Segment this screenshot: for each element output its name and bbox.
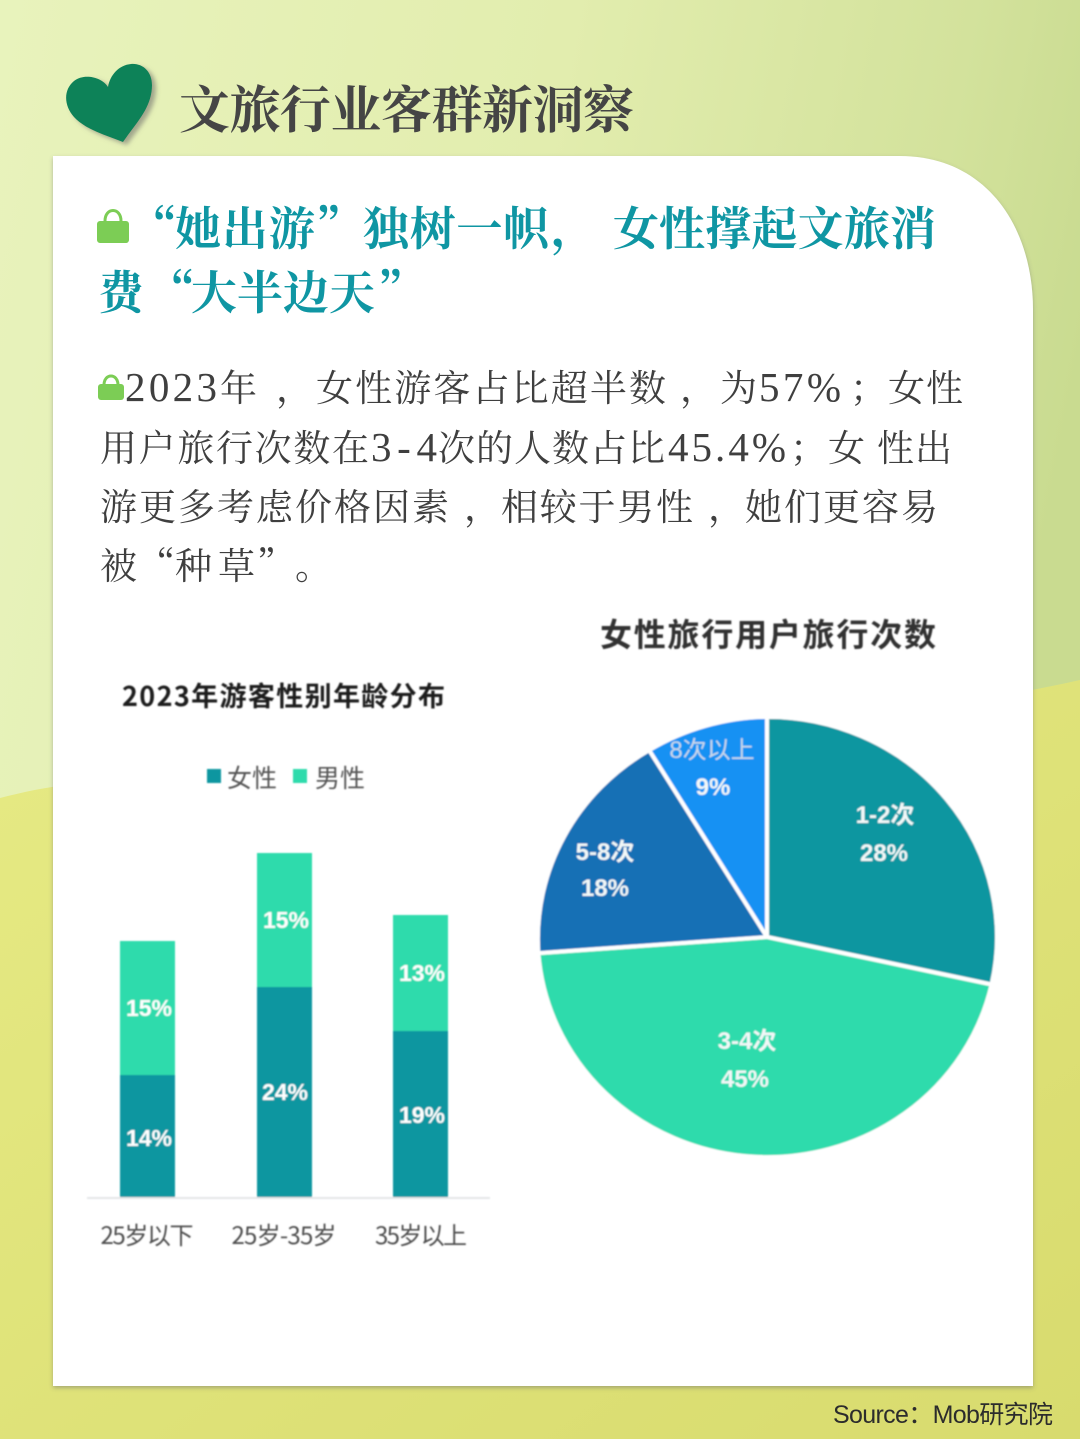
- legend: 男性: [315, 759, 365, 795]
- body text: ，: [680, 369, 717, 410]
- pie labels: 5-8次: [576, 839, 634, 866]
- pie labels: 9%: [696, 774, 730, 801]
- body text: ”: [257, 536, 294, 590]
- heading: ”: [316, 193, 362, 259]
- bar value labels: 19%: [399, 1102, 445, 1128]
- heading: 独树一帜: [363, 193, 553, 259]
- body text: 为: [720, 368, 757, 410]
- bar value labels: 15%: [263, 907, 309, 933]
- bar value labels: 13%: [399, 960, 445, 986]
- body text: 3-4: [371, 424, 437, 470]
- legend: [207, 759, 365, 795]
- chart title: 女性旅行用户旅行次数: [600, 610, 936, 656]
- pie labels: 45%: [721, 1066, 769, 1093]
- icon: body bag: [98, 376, 124, 400]
- slices: [538, 717, 997, 1157]
- heading: 她出游: [175, 193, 315, 259]
- body text: 57%: [759, 364, 841, 410]
- body text: 相较于男性: [501, 487, 693, 529]
- bars: [87, 853, 490, 1199]
- body text: ，: [708, 488, 745, 529]
- body text: 游更多考虑价格因素: [100, 487, 449, 529]
- body text: ；: [790, 429, 827, 470]
- icon: heading bag: [97, 210, 129, 243]
- body text: 女: [828, 428, 865, 470]
- category labels: 35岁以上: [375, 1216, 467, 1251]
- pie labels: 28%: [860, 840, 908, 867]
- pie labels: 3-4次: [718, 1028, 776, 1055]
- pie chart: trips: [538, 610, 997, 1157]
- bar value labels: 24%: [262, 1079, 308, 1105]
- icon: heart: [66, 64, 152, 142]
- pie labels: 1-2次: [856, 802, 914, 829]
- body text: 2023: [125, 364, 217, 410]
- body text: 女性: [888, 368, 963, 410]
- body text: 。: [295, 547, 332, 588]
- heading: [97, 193, 936, 323]
- title: 文旅行业客群新洞察: [179, 69, 634, 143]
- body text: 种草: [175, 546, 255, 588]
- body text: ，: [276, 369, 313, 410]
- body text: [98, 364, 963, 590]
- body text: 女性游客占比超半数: [316, 368, 666, 410]
- heading: 女性撑起文旅消: [613, 193, 936, 259]
- body text: 45.4%: [668, 424, 786, 470]
- heading: “: [149, 257, 195, 323]
- pie labels: 18%: [581, 875, 629, 902]
- body text: 年: [220, 368, 257, 410]
- pie labels: 8次以上: [669, 737, 755, 764]
- heading: ，: [551, 193, 597, 259]
- category labels: 25岁以下: [100, 1216, 194, 1251]
- source note: Source：Mob研究院: [833, 1401, 1053, 1429]
- heading: 费: [98, 257, 147, 323]
- bar value labels: [126, 907, 445, 1151]
- heading: ”: [378, 257, 424, 323]
- category labels: [100, 1216, 467, 1251]
- category labels: 25岁-35岁: [232, 1216, 336, 1251]
- heading: 大半边天: [191, 257, 375, 323]
- body text: 被: [100, 547, 137, 588]
- heading: “: [131, 193, 177, 259]
- body text: 用户旅行次数在: [100, 428, 369, 470]
- body text: ，: [464, 488, 501, 529]
- chart title: 2023年游客性别年龄分布: [122, 675, 445, 714]
- bar value labels: 14%: [126, 1125, 172, 1151]
- body text: ；: [850, 369, 887, 410]
- bar chart: age distribution: [87, 675, 490, 1251]
- legend: 女性: [227, 759, 277, 795]
- body text: 次的人数占比: [438, 428, 665, 470]
- body text: 她们更容易: [745, 487, 938, 529]
- bar value labels: 15%: [126, 995, 172, 1021]
- panel: content card: [53, 156, 1033, 1386]
- body text: “: [138, 536, 175, 590]
- body text: 性出: [877, 428, 952, 470]
- pie labels: [576, 737, 914, 1093]
